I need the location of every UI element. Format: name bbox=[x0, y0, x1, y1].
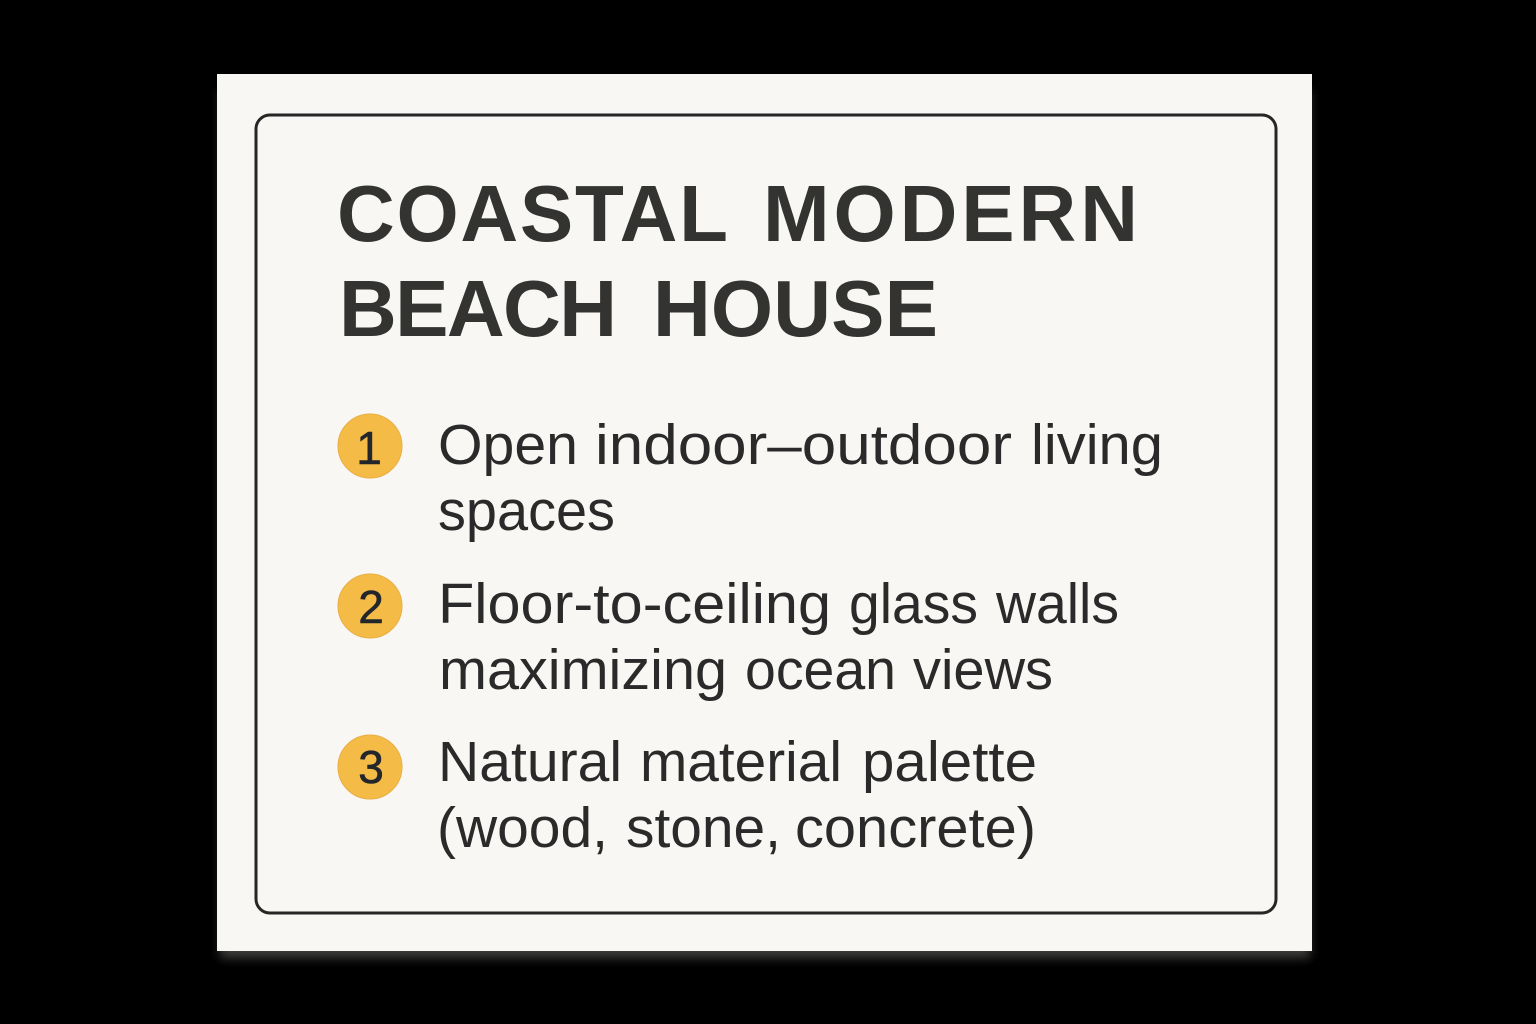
text: item 2: glass bbox=[849, 572, 978, 636]
icon: number badge 2: 2 bbox=[358, 581, 384, 633]
text: item 3: stone, bbox=[626, 796, 781, 860]
text: item 2: Floor-to-ceiling bbox=[438, 572, 831, 636]
text: item 3: (wood, bbox=[437, 796, 608, 860]
icon: number badge 1 bbox=[338, 414, 402, 478]
title: MODERN bbox=[763, 169, 1138, 258]
text: item 3: material bbox=[640, 730, 842, 794]
panel: inner border bbox=[256, 115, 1276, 913]
text: item 1: Open bbox=[438, 413, 578, 477]
icon: number badge 3 bbox=[338, 735, 402, 799]
text: item 2: views bbox=[913, 638, 1053, 702]
icon: number badge 2 bbox=[338, 574, 402, 638]
text: item 1: indoor–outdoor bbox=[595, 413, 1012, 477]
text: item 1 bbox=[438, 413, 1163, 543]
icon: number badge 1: 1 bbox=[356, 422, 382, 474]
text: item 1: spaces bbox=[438, 479, 615, 543]
text: item 2: maximizing bbox=[439, 638, 727, 702]
list item 2 bbox=[338, 572, 1119, 702]
text: item 3: concrete) bbox=[795, 796, 1036, 860]
text: item 3: palette bbox=[862, 730, 1037, 794]
icon: number badge 3: 3 bbox=[358, 741, 384, 793]
title: BEACH bbox=[339, 264, 617, 353]
text: item 3 bbox=[437, 730, 1037, 860]
list item 3 bbox=[338, 730, 1037, 860]
title: HOUSE bbox=[653, 264, 938, 353]
text: item 2: walls bbox=[995, 572, 1119, 636]
title bbox=[337, 169, 1138, 353]
panel: card bbox=[217, 74, 1312, 951]
text: item 2: ocean bbox=[745, 638, 896, 702]
text: item 1: living bbox=[1031, 413, 1163, 477]
text: item 3: Natural bbox=[438, 730, 622, 794]
list item 1 bbox=[338, 413, 1163, 543]
title: COASTAL bbox=[337, 169, 728, 258]
text: item 2 bbox=[438, 572, 1119, 702]
